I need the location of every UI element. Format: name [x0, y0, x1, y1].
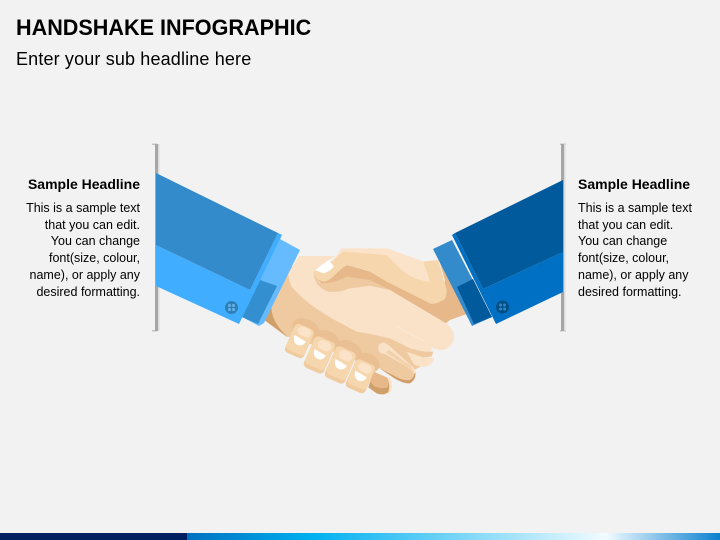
second finger underside [403, 348, 433, 357]
left palm [272, 267, 430, 380]
right cuff [433, 240, 492, 326]
left text block: This is a sample text [26, 201, 140, 215]
right hand highlight [333, 248, 430, 282]
finger crease line [397, 327, 425, 342]
right text block: name), or apply any [578, 268, 688, 282]
bottom dark bar segment [0, 533, 187, 540]
finger shadows [289, 314, 383, 376]
left hand light palm [288, 256, 454, 352]
left text block: Sample Headline [28, 176, 140, 192]
hands [265, 248, 468, 395]
title: HANDSHAKE INFOGRAPHIC [16, 15, 311, 40]
right button [496, 300, 509, 314]
thumb nail [315, 259, 334, 273]
left text block: name), or apply any [30, 268, 140, 282]
right wrist shadow band [313, 263, 468, 324]
finger 3 [323, 345, 357, 385]
bottom thumb stub [368, 372, 392, 395]
bottom gradient bar [0, 533, 720, 540]
right text block: You can change [578, 234, 667, 248]
right text block: font(size, colour, [578, 251, 669, 265]
left divider line [152, 144, 160, 332]
subtitle: Enter your sub headline here [16, 49, 251, 69]
right text block: This is a sample text [578, 201, 692, 215]
right sleeve [433, 180, 563, 326]
left text block: that you can edit. [45, 218, 140, 232]
left text block [26, 176, 140, 299]
lower palm dark rim [370, 357, 416, 383]
left text block: font(size, colour, [49, 251, 140, 265]
left cuff [242, 239, 300, 326]
left sleeve upper [156, 173, 278, 290]
right text block: Sample Headline [578, 176, 690, 192]
left wrist shadow [265, 303, 293, 337]
right sleeve lower [452, 233, 563, 324]
left sleeve lower [156, 233, 282, 324]
left text block: You can change [51, 234, 140, 248]
right sleeve upper [455, 180, 563, 289]
left text block: desired formatting. [36, 285, 140, 299]
thumb underside ring [313, 272, 390, 292]
lower finger capsule [378, 342, 415, 374]
right divider line [560, 144, 566, 332]
finger 4 [344, 358, 376, 395]
finger 2 [302, 335, 336, 375]
right text block [578, 176, 692, 299]
left sleeve [156, 173, 300, 326]
right text block: desired formatting. [578, 285, 682, 299]
right hand main thumb [313, 248, 447, 304]
left button [225, 301, 238, 314]
finger 1 [284, 322, 315, 360]
pale finger rim [407, 352, 434, 367]
right text block: that you can edit. [578, 218, 673, 232]
